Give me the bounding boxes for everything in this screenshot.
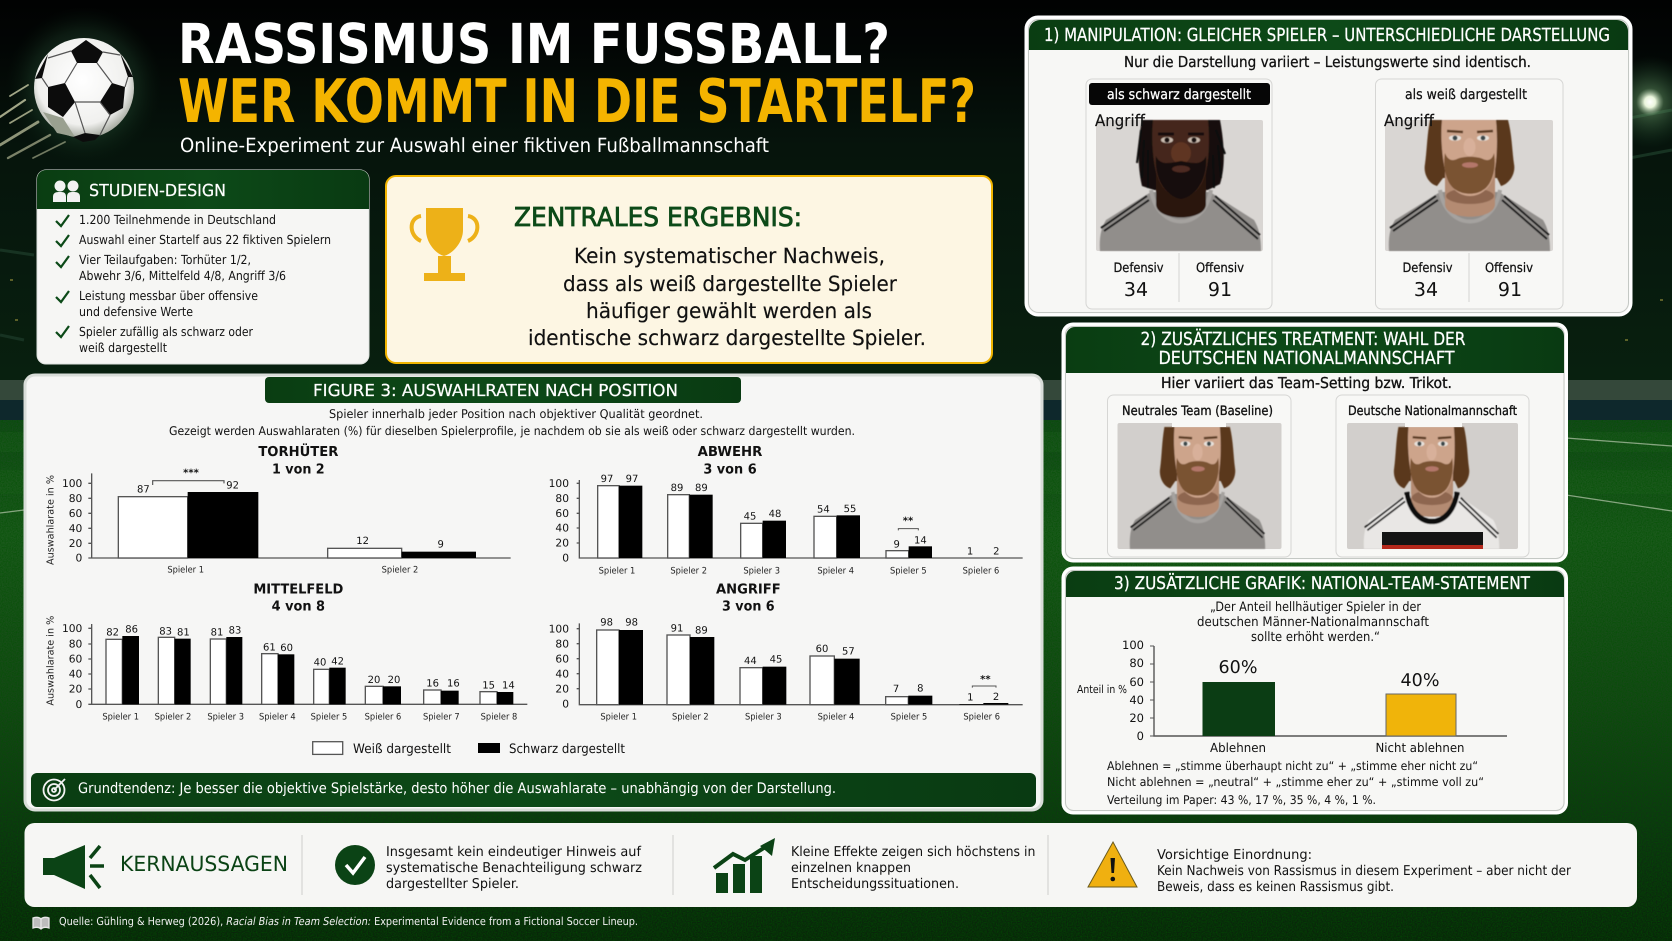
chart: angriff: 98: [600, 617, 613, 628]
panel: zentrales ergebnis: [386, 176, 992, 363]
chart: torhüter: Auswahlarate in %: [44, 475, 56, 565]
list: study facts: [56, 212, 331, 355]
card: als weiß dargestellt: als weiß dargestellt: [1405, 87, 1527, 103]
icon: target: [44, 779, 65, 800]
chart: torhüter: Spieler 1: [167, 564, 204, 575]
chart: mittelfeld: 81: [211, 626, 223, 638]
chart: angriff: **: [980, 673, 991, 685]
chart: angriff: 100: [549, 622, 569, 635]
title: RASSISMUS IM FUSSBALL?: [178, 12, 890, 76]
list: study facts: Abwehr 3/6, Mittelfeld 4/8, Angriff 3/6: [79, 268, 286, 283]
chart: abwehr: 1: [967, 545, 973, 557]
notes: scale definition: Ablehnen = „stimme überhaupt nicht zu“ + „stimme eher nicht zu“: [1107, 759, 1478, 773]
title: WER KOMMT IN DIE STARTELF?: [178, 67, 976, 137]
quote: „Der Anteil hellhäutiger Spieler in der: [1210, 600, 1422, 615]
chart: torhüter: 92: [226, 479, 239, 491]
chart: angriff: 2: [993, 691, 999, 703]
chart: mittelfeld: Spieler 1: [102, 712, 139, 722]
chart: abwehr: 89: [695, 482, 708, 494]
chart: abwehr: Spieler 2: [670, 566, 707, 576]
heading: zentrales ergebnis: ZENTRALES ERGEBNIS:: [514, 203, 802, 233]
chart: torhüter: 80: [69, 492, 82, 505]
icon: megaphone: [43, 845, 104, 889]
chart: angriff: Spieler 2: [672, 711, 709, 722]
heading: treatment: 2) ZUSÄTZLICHES TREATMENT: WAHL DER: [1140, 328, 1466, 350]
list: study facts: Auswahl einer Startelf aus 22 fiktiven Spielern: [79, 232, 331, 247]
panel: 3) zusätzliche grafik: [1063, 568, 1566, 813]
chart: torhüter: 100: [62, 477, 82, 490]
bar chart: statement: 60: [1129, 675, 1144, 689]
chart: angriff: 98: [625, 617, 638, 628]
card: neutrales team: [1108, 395, 1291, 557]
chart: abwehr: 97: [626, 473, 638, 485]
panel: 1) manipulation: [1026, 17, 1631, 315]
chart: mittelfeld: 40: [69, 668, 82, 680]
chart: torhüter: 60: [69, 507, 82, 520]
chart: torhüter: [44, 443, 511, 575]
title: [178, 12, 976, 157]
card: neutrales team: Neutrales Team (Baseline): [1122, 404, 1273, 419]
header: studien-design: STUDIEN-DESIGN: [89, 181, 226, 200]
text: statement 1: systematische Benachteiligung schwarz: [386, 860, 642, 876]
legend: Weiß dargestellt: [353, 742, 451, 757]
text: result statement: [528, 244, 926, 350]
text: figure description: [169, 407, 855, 438]
heading: statement: 3) ZUSÄTZLICHE GRAFIK: NATIONAL-TEAM-STATEMENT: [1114, 573, 1530, 594]
list: study facts: weiß dargestellt: [79, 340, 167, 355]
text: statement 3: Beweis, dass es keinen Rassismus gibt.: [1157, 879, 1394, 895]
chart: mittelfeld: Spieler 7: [423, 712, 460, 722]
heading: treatment: [1140, 328, 1466, 369]
card: als weiß dargestellt: Angriff: [1384, 111, 1435, 130]
chart: mittelfeld: [44, 581, 527, 722]
chart: abwehr: 80: [555, 492, 569, 505]
text: statement 2: Kleine Effekte zeigen sich höchstens in: [791, 844, 1036, 860]
chart: abwehr: Spieler 5: [890, 566, 927, 576]
text: statement 1: [386, 844, 642, 892]
chart: abwehr: 55: [844, 503, 856, 515]
chart: mittelfeld: 86: [125, 623, 138, 635]
panel: figure 3: [25, 375, 1042, 810]
chart: torhüter: 87: [137, 484, 150, 495]
text: statement 2: [791, 844, 1036, 892]
chart: abwehr: Spieler 6: [963, 566, 999, 576]
chart: abwehr: 100: [549, 477, 569, 490]
text: figure description: Spieler innerhalb jeder Position nach objektiver Qualität geordnet.: [329, 407, 703, 421]
bar chart: statement: Ablehnen: [1210, 740, 1266, 755]
chart: angriff: ANGRIFF: [716, 581, 781, 597]
chart: mittelfeld: 15: [482, 679, 495, 691]
quote: deutschen Männer-Nationalmannschaft: [1197, 615, 1429, 630]
chart: mittelfeld: 100: [62, 622, 82, 635]
chart: angriff: 8: [917, 683, 924, 694]
chart: torhüter: 20: [69, 537, 82, 550]
chart: mittelfeld: 80: [69, 638, 82, 650]
heading: kernaussagen: KERNAUSSAGEN: [120, 852, 288, 876]
bar chart: statement: 40: [1129, 693, 1144, 707]
chart: angriff: Spieler 4: [818, 711, 854, 722]
chart: abwehr: 89: [671, 482, 683, 494]
chart: abwehr: 40: [555, 522, 569, 534]
list: study facts: Vier Teilaufgaben: Torhüter 1/2,: [79, 252, 251, 267]
card: als weiß dargestellt: Defensiv: [1402, 261, 1453, 276]
heading: figure 3: [265, 377, 741, 403]
panel: kernaussagen: [24, 823, 1637, 907]
chart: mittelfeld: 14: [502, 679, 515, 691]
text: statement 1: Insgesamt kein eindeutiger Hinweis auf: [386, 844, 642, 860]
chart: mittelfeld: 0: [76, 698, 82, 711]
icon: book: [33, 917, 49, 929]
list: study facts: und defensive Werte: [79, 304, 193, 319]
banner: grundtendenz: [31, 773, 1036, 807]
chart: angriff: 60: [555, 652, 569, 665]
text: statement 1: dargestellter Spieler.: [386, 876, 519, 892]
chart: abwehr: 0: [562, 552, 569, 564]
bar chart: statement: Nicht ablehnen: [1376, 740, 1464, 755]
chart: mittelfeld: 20: [368, 674, 380, 686]
chart: mittelfeld: 60: [280, 642, 293, 654]
chart: torhüter: TORHÜTER: [258, 443, 338, 459]
chart: abwehr: Spieler 4: [817, 566, 854, 576]
chart: abwehr: 48: [769, 508, 781, 520]
chart: angriff: 1: [967, 691, 974, 703]
chart: mittelfeld: Spieler 2: [155, 712, 191, 722]
card: als schwarz dargestellt: als schwarz dargestellt: [1107, 87, 1251, 103]
chart: mittelfeld: 16: [447, 678, 460, 689]
chart: angriff: 57: [842, 646, 855, 657]
panel: 2) zusätzliches treatment: [1063, 324, 1566, 561]
chart: mittelfeld: 83: [159, 625, 172, 637]
chart: mittelfeld: 42: [331, 656, 344, 667]
chart: mittelfeld: 60: [69, 653, 82, 665]
icon: check circle: [335, 845, 375, 885]
chart: angriff: 60: [816, 643, 828, 655]
chart: mittelfeld: Spieler 3: [207, 712, 244, 722]
panel: studien-design: [37, 170, 369, 364]
chart: mittelfeld: 40: [314, 657, 326, 668]
card: als schwarz dargestellt: Angriff: [1095, 111, 1146, 130]
chart: angriff: 44: [744, 655, 757, 667]
chart: abwehr: ABWEHR: [698, 443, 762, 459]
text: figure description: Gezeigt werden Auswahlaraten (%) für dieselben Spielerprofile, je nachdem ob sie als weiß oder schwarz dargestellt wurden.: [169, 424, 855, 438]
chart: abwehr: 45: [744, 511, 756, 522]
bar chart: statement: 80: [1129, 656, 1144, 670]
chart: angriff: 89: [695, 624, 708, 636]
chart: torhüter: 40: [69, 522, 82, 535]
chart: mittelfeld: 61: [263, 641, 276, 653]
header: studien-design: [37, 170, 369, 209]
bar chart: statement: 100: [1122, 638, 1144, 652]
chart: mittelfeld: MITTELFELD: [253, 581, 343, 597]
chart: abwehr: 20: [555, 537, 569, 549]
bar chart: statement: [1077, 638, 1507, 755]
chart: abwehr: **: [903, 515, 913, 527]
text: result statement: dass als weiß dargestellte Spieler: [563, 272, 897, 296]
chart: angriff: 45: [770, 654, 782, 665]
text: statement 3: Vorsichtige Einordnung:: [1157, 847, 1312, 863]
legend: Schwarz dargestellt: [509, 742, 625, 757]
banner: grundtendenz: Grundtendenz: Je besser die objektive Spielstärke, desto höher die Auswahlarate – unabhängig von der Darstellung.: [78, 781, 836, 797]
chart: abwehr: 14: [914, 535, 927, 546]
chart: mittelfeld: 20: [69, 683, 82, 695]
chart: mittelfeld: Auswahlarate in %: [44, 616, 56, 706]
bar chart: statement: 0: [1137, 729, 1144, 743]
chart: mittelfeld: 20: [388, 674, 400, 686]
list: study facts: Leistung messbar über offensive: [79, 288, 258, 303]
icon: rising chart: [714, 838, 775, 893]
chart: abwehr: 97: [601, 473, 613, 485]
card: als schwarz dargestellt: 34: [1124, 279, 1148, 301]
icon: trophy: [412, 208, 477, 281]
notes: scale definition: Nicht ablehnen = „neutral“ + „stimme eher zu“ + „stimme voll zu“: [1107, 775, 1484, 789]
chart: mittelfeld: Spieler 4: [259, 712, 296, 722]
text: result statement: Kein systematischer Nachweis,: [574, 244, 885, 268]
icon: warning triangle: [1088, 842, 1137, 887]
card: als weiß dargestellt: 34: [1414, 279, 1438, 301]
text: statement 2: Entscheidungssituationen.: [791, 876, 959, 892]
card: als schwarz dargestellt: Offensiv: [1196, 261, 1244, 276]
heading: figure 3: FIGURE 3: AUSWAHLRATEN NACH POSITION: [313, 381, 678, 400]
card: als weiß dargestellt: 91: [1498, 279, 1522, 301]
chart: abwehr: [549, 443, 1023, 576]
chart: abwehr: 3 von 6: [703, 461, 757, 477]
chart: angriff: Spieler 5: [891, 711, 927, 722]
chart: torhüter: ***: [183, 467, 199, 479]
card: als schwarz dargestellt: 91: [1208, 279, 1232, 301]
chart: angriff: 0: [562, 697, 569, 710]
chart: mittelfeld: 16: [426, 678, 439, 689]
source line: Quelle: Gühling & Herweg (2026), Racial Bias in Team Selection: Experimental Evidence from a Fictional Soccer Lineup.: [59, 915, 638, 928]
chart: angriff: Spieler 3: [745, 711, 782, 722]
bar chart: statement: 40%: [1401, 671, 1439, 691]
chart: angriff: [549, 581, 1023, 722]
chart: angriff: Spieler 1: [600, 711, 637, 722]
chart: angriff: 7: [893, 683, 899, 695]
subheading: treatment: Hier variiert das Team-Setting bzw. Trikot.: [1161, 374, 1452, 392]
card: deutsche nationalmannschaft: [1336, 395, 1529, 557]
chart: torhüter: Spieler 2: [382, 564, 418, 575]
quote: sollte erhöht werden.“: [1251, 630, 1380, 645]
title: Online-Experiment zur Auswahl einer fiktiven Fußballmannschaft: [180, 134, 769, 157]
chart: abwehr: 2: [993, 545, 1000, 557]
bar chart: statement: 20: [1129, 711, 1144, 725]
text: result statement: identische schwarz dargestellte Spieler.: [528, 326, 926, 350]
quote: [1197, 600, 1429, 645]
chart: abwehr: 60: [555, 507, 569, 520]
card: als weiß dargestellt: Offensiv: [1485, 261, 1533, 276]
card: als schwarz dargestellt: [1086, 79, 1272, 309]
chart: torhüter: 0: [76, 552, 82, 564]
chart: abwehr: Spieler 1: [599, 566, 635, 576]
chart: angriff: 91: [671, 622, 683, 634]
text: statement 3: [1157, 847, 1571, 895]
bar chart: statement: 60%: [1219, 658, 1257, 678]
list: study facts: 1.200 Teilnehmende in Deutschland: [79, 212, 276, 227]
notes: scale definition: Verteilung im Paper: 43 %, 17 %, 35 %, 4 %, 1 %.: [1107, 793, 1376, 807]
subheading: manipulation: Nur die Darstellung variiert – Leistungswerte sind identisch.: [1124, 53, 1531, 71]
legend: [313, 742, 625, 757]
card: als weiß dargestellt: [1376, 79, 1563, 309]
list: study facts: Spieler zufällig als schwarz oder: [79, 324, 254, 339]
card: als schwarz dargestellt: Defensiv: [1114, 261, 1164, 276]
chart: mittelfeld: 81: [177, 627, 190, 638]
chart: angriff: 3 von 6: [722, 598, 775, 614]
chart: abwehr: Spieler 3: [743, 566, 780, 576]
chart: angriff: Spieler 6: [963, 711, 1000, 722]
heading: treatment: DEUTSCHEN NATIONALMANNSCHAFT: [1158, 348, 1455, 369]
chart: torhüter: 1 von 2: [272, 461, 325, 477]
icon: soccer ball: [0, 7, 162, 163]
card: deutsche nationalmannschaft: Deutsche Nationalmannschaft: [1348, 404, 1517, 419]
chart: mittelfeld: Spieler 8: [481, 712, 517, 722]
chart: mittelfeld: 83: [229, 624, 241, 636]
chart: torhüter: 9: [437, 538, 444, 550]
text: result statement: häufiger gewählt werden als: [586, 299, 872, 323]
chart: mittelfeld: Spieler 6: [365, 712, 401, 722]
chart: angriff: 40: [555, 667, 569, 680]
chart: mittelfeld: 4 von 8: [272, 598, 325, 614]
chart: abwehr: 9: [893, 538, 900, 550]
bar chart: statement: Anteil in %: [1077, 683, 1127, 696]
chart: angriff: 80: [555, 637, 569, 650]
chart: angriff: 20: [555, 682, 569, 695]
chart: mittelfeld: Spieler 5: [311, 712, 347, 722]
text: statement 2: einzelnen knappen: [791, 860, 911, 876]
chart: mittelfeld: 82: [106, 627, 119, 638]
chart: torhüter: 12: [356, 535, 369, 547]
text: statement 3: Kein Nachweis von Rassismus in diesem Experiment – aber nicht der: [1157, 863, 1571, 879]
chart: abwehr: 54: [817, 504, 830, 515]
notes: scale definition: [1107, 759, 1484, 807]
